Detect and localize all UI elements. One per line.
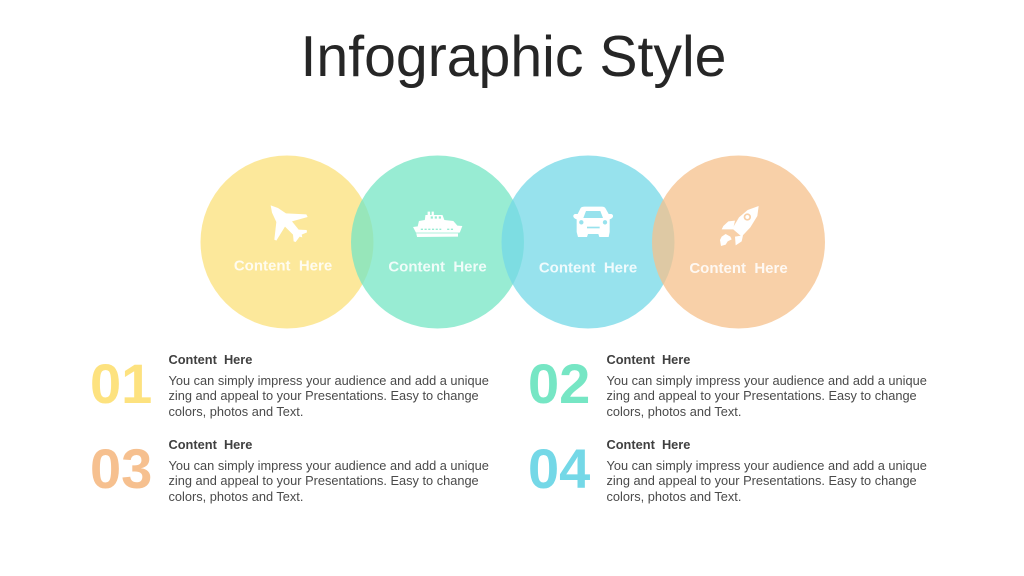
text 03: colors, photos and Text. <box>168 489 303 504</box>
text 04 <box>606 458 927 504</box>
number 02: 02 <box>528 352 590 415</box>
icon: rocket <box>720 206 759 246</box>
heading 04: Content Here <box>606 437 690 452</box>
number 04: 04 <box>528 437 590 500</box>
circle: yellow plane <box>200 156 374 328</box>
heading 02: Content Here <box>606 352 690 367</box>
circle: blue car <box>502 156 674 328</box>
number 01: 01 <box>90 352 152 415</box>
text 03 <box>168 458 489 504</box>
title: Infographic Style <box>300 25 726 89</box>
heading 03: Content Here <box>168 437 252 452</box>
panel: item 01 <box>90 352 489 419</box>
circle: green ship <box>351 156 524 328</box>
number 03: 03 <box>90 437 152 500</box>
text 02: You can simply impress your audience and add a unique <box>606 373 927 388</box>
icon: plane <box>271 205 308 242</box>
text 01: colors, photos and Text. <box>168 404 303 419</box>
text 01: You can simply impress your audience and add a unique <box>168 373 489 388</box>
text 02 <box>606 373 927 419</box>
text 04: colors, photos and Text. <box>606 489 741 504</box>
panel: item 03 <box>90 437 489 504</box>
heading 01: Content Here <box>168 352 252 367</box>
panel: item 04 <box>528 437 927 504</box>
panel: item 02 <box>528 352 927 419</box>
label: circle 4: Content Here <box>689 260 788 277</box>
text 03: zing and appeal to your Presentations. Easy to change <box>168 473 479 488</box>
text 04: You can simply impress your audience and add a unique <box>606 458 927 473</box>
icon: ship <box>413 212 462 237</box>
text 01: zing and appeal to your Presentations. Easy to change <box>168 388 479 403</box>
icon: car <box>573 207 613 237</box>
text 04: zing and appeal to your Presentations. Easy to change <box>606 473 917 488</box>
text 03: You can simply impress your audience and add a unique <box>168 458 489 473</box>
label: circle 1: Content Here <box>234 258 332 274</box>
text 02: colors, photos and Text. <box>606 404 741 419</box>
circle: orange rocket <box>652 156 825 328</box>
label: circle 2: Content Here <box>388 258 487 276</box>
text 02: zing and appeal to your Presentations. Easy to change <box>606 388 917 403</box>
label: circle 3: Content Here <box>539 260 637 276</box>
text 01 <box>168 373 489 419</box>
